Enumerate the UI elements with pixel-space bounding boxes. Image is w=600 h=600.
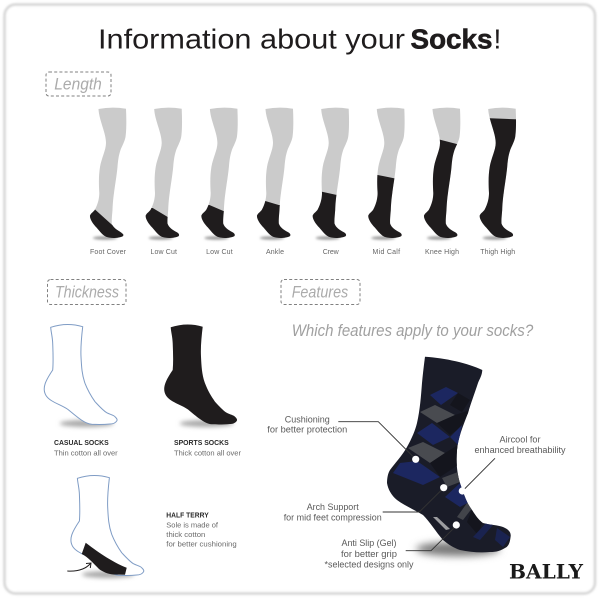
text: sports socks: SPORTS SOCKS bbox=[174, 438, 229, 447]
callout: cushioning: for better protection bbox=[267, 425, 347, 435]
text: half terry bbox=[166, 510, 237, 548]
title: ! bbox=[494, 24, 501, 54]
text: sports socks bbox=[174, 438, 241, 458]
leg: Thigh High: Thigh High bbox=[480, 249, 515, 256]
heading: Features bbox=[281, 280, 360, 304]
callout: aircool: Aircool for bbox=[500, 434, 541, 444]
text: casual socks bbox=[54, 438, 118, 458]
callout: cushioning bbox=[267, 415, 419, 463]
text: casual socks: CASUAL SOCKS bbox=[54, 438, 109, 447]
callout: cushioning: Cushioning bbox=[285, 415, 330, 425]
sock: argyle feature sock bbox=[387, 356, 511, 562]
callout: arch support bbox=[284, 484, 447, 523]
sock: sports solid bbox=[164, 324, 237, 427]
leg: Knee High: Knee High bbox=[425, 249, 459, 256]
heading: Thickness: Thickness bbox=[55, 282, 119, 302]
leg: Mid Calf bbox=[368, 108, 405, 256]
text: half terry: Sole is made of bbox=[166, 521, 219, 530]
callout: aircool: enhanced breathability bbox=[474, 445, 566, 455]
text: sports socks: Thick cotton all over bbox=[174, 448, 241, 458]
leg: Mid Calf: Mid Calf bbox=[373, 249, 400, 256]
leg: Low Cut bbox=[146, 108, 182, 256]
sole logo bbox=[433, 517, 450, 530]
leg: Low Cut second bbox=[201, 108, 238, 256]
callout: anti slip: for better grip bbox=[341, 549, 397, 559]
sock: half terry with black sole bbox=[71, 475, 144, 578]
heading: Thickness bbox=[48, 280, 126, 304]
leg: Ankle: Ankle bbox=[266, 249, 284, 256]
text: half terry: for better cushioning bbox=[166, 539, 237, 548]
callout: anti slip bbox=[324, 521, 460, 569]
callout: arch support: Arch Support bbox=[307, 502, 359, 512]
question text: Which features apply to your socks? bbox=[292, 321, 534, 340]
heading: Length: Length bbox=[54, 74, 102, 93]
heading: Length bbox=[46, 72, 111, 96]
title: Information about your bbox=[98, 24, 405, 54]
leg: Thigh High bbox=[480, 108, 516, 256]
heading: Features: Features bbox=[292, 282, 349, 302]
arrow: pointing to sole bbox=[67, 563, 91, 571]
callout: aircool bbox=[459, 434, 566, 495]
callout: arch support: for mid feet compression bbox=[284, 513, 382, 523]
callout: anti slip: *selected designs only bbox=[324, 559, 414, 569]
leg: Low Cut: Low Cut bbox=[150, 249, 177, 256]
leg: Ankle bbox=[257, 108, 293, 256]
leg: Low Cut second: Low Cut bbox=[206, 249, 233, 256]
leg: Crew: Crew bbox=[323, 249, 340, 256]
text: casual socks: Thin cotton all over bbox=[54, 448, 118, 458]
callout: anti slip: Anti Slip (Gel) bbox=[342, 538, 396, 548]
title bbox=[98, 24, 501, 54]
title: Socks bbox=[410, 24, 492, 54]
leg: Foot Cover bbox=[90, 108, 127, 256]
text: half terry: HALF TERRY bbox=[166, 510, 209, 520]
leg: Crew bbox=[313, 108, 349, 256]
sock: casual outline bbox=[44, 324, 117, 427]
leg: Foot Cover: Foot Cover bbox=[90, 249, 127, 256]
text: half terry: thick cotton bbox=[166, 530, 205, 539]
leg: Knee High bbox=[424, 108, 460, 256]
logo: BALLY: BALLY bbox=[509, 560, 584, 583]
